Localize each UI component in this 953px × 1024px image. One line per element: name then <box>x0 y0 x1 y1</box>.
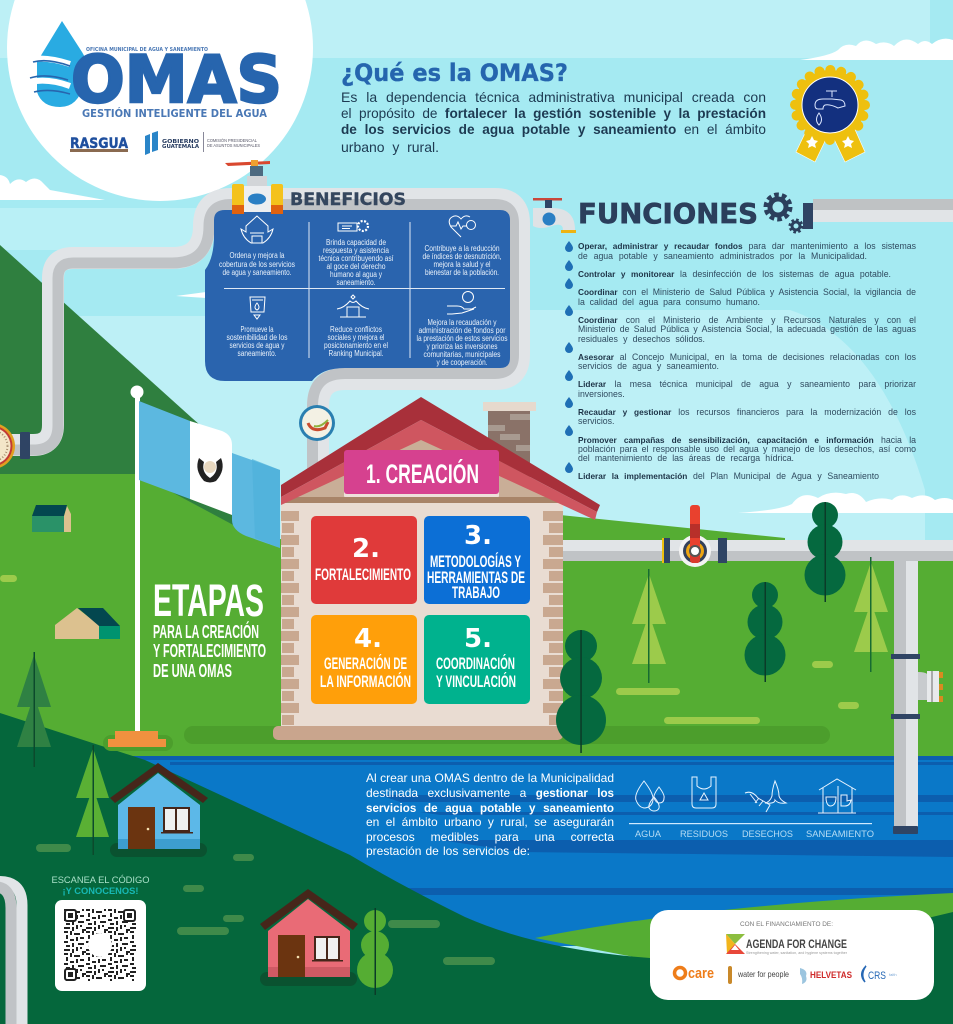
functions list: Controlar y monitorear la desinfección de los sistemas de agua potable. <box>578 269 891 279</box>
water paragraph <box>366 771 614 858</box>
heading: ETAPAS: DE UNA OMAS <box>153 661 232 681</box>
badge with faucet <box>795 70 865 162</box>
functions list: Operar, administrar y recaudar fondos para dar mantenimiento a los sistemas <box>578 241 916 251</box>
grass marks <box>0 575 859 724</box>
functions list: Promover campañas de sensibilización, capacitación e información hacia la <box>578 435 916 445</box>
tree: bush by pink house <box>357 908 393 995</box>
benefit: nutrición: Contribuye a la reducción <box>424 244 500 253</box>
logo: CRS <box>862 966 897 982</box>
water paragraph: en el ámbito urbano y rural, se asegurarán <box>366 815 614 829</box>
service icons and labels: AGUA <box>635 829 662 840</box>
benefit: sostenibilidad: servicios de agua y <box>230 341 284 350</box>
tree: dark conifer left <box>17 652 51 767</box>
roof <box>281 397 600 512</box>
cloud: top right <box>800 39 953 60</box>
benefit: capacidad <box>318 221 394 287</box>
functions list: servicios de agua y saneamiento. <box>578 361 719 371</box>
service icons and labels: RESIDUOS <box>680 829 728 840</box>
small tan house <box>55 608 120 639</box>
benefit: recaudación: la prestación de estos servicios <box>416 334 508 343</box>
benefit: recaudación: comunitarias, municipales <box>424 350 500 359</box>
Guatemala flag with pole <box>103 386 280 751</box>
functions list: Ministerio de Salud Pública y Asistencia Social, la adecuada gestión de las aguas <box>578 324 916 334</box>
benefit: capacidad: respuesta y asistencia <box>323 246 389 255</box>
stage 1 banner <box>344 450 499 497</box>
small green house <box>32 505 71 532</box>
benefit: recaudación: administración de fondos por <box>418 326 506 335</box>
logo: Agenda for Change: Strengthening water, sanitation, and hygiene systems together <box>746 951 848 955</box>
partner logos in circle: GUATEMALA <box>162 144 200 150</box>
functions list: del mantenimiento de las áreas de recarga hídrica. <box>578 453 794 463</box>
base <box>273 726 563 740</box>
benefit: conflictos: posicionamiento en el <box>324 341 388 350</box>
benefit: capacidad: Brinda capacidad de <box>326 238 386 247</box>
service icons and labels: SANEAMIENTO <box>806 829 874 840</box>
gable <box>292 438 552 500</box>
benefit: cobertura <box>219 216 295 277</box>
benefit: nutrición: bienestar de la población. <box>425 268 499 277</box>
cloud: left <box>0 175 105 200</box>
ground shadow strip <box>184 726 830 744</box>
logo: water for people <box>728 966 789 984</box>
intro text block: urbano y rural. <box>341 139 439 155</box>
stage 3 card <box>424 516 530 604</box>
partner logos in circle: COMISIÓN PRESIDENCIAL <box>207 137 257 143</box>
logo circle <box>7 0 313 201</box>
tree: light conifer right <box>854 557 888 672</box>
benefit: capacidad: saneamiento. <box>336 278 376 287</box>
heading: ETAPAS: Y FORTALECIMIENTO <box>153 641 266 661</box>
valve on top of benefits <box>225 160 283 214</box>
heading: BENEFICIOS: BENEFICIOS <box>290 190 406 210</box>
functions list: de agua potable y saneamiento administrados por la Municipalidad. <box>578 251 867 261</box>
functions list: Asesorar al Concejo Municipal, en la toma de decisiones relacionadas con los <box>578 352 916 362</box>
stage 3 card: HERRAMIENTAS DE <box>427 569 525 587</box>
service icons and labels <box>629 777 874 840</box>
intro text block: el propósito de fortalecer la gestión sostenible y la prestación <box>341 106 766 120</box>
stage 3 card: 3. <box>464 521 492 551</box>
heading: ¿Qué es la OMAS?: ¿Qué es la OMAS? <box>341 59 568 87</box>
icon: agua <box>636 781 664 811</box>
stage 2 card <box>311 516 417 604</box>
stage 5 card: COORDINACIÓN <box>436 654 515 673</box>
OMAS logo: OFICINA MUNICIPAL DE AGUA Y SANEAMIENTO <box>86 47 208 53</box>
partner logos in circle: RASGUA <box>70 136 128 152</box>
pink house <box>260 889 358 986</box>
water paragraph: prestación de los servicios de: <box>366 844 530 858</box>
river <box>130 756 953 946</box>
partner logos in circle <box>70 131 260 155</box>
stage 4 card: 4. <box>354 624 382 654</box>
functions list: servicios. <box>578 416 614 426</box>
stage 3 card: TRABAJO <box>452 584 500 602</box>
stage 5 card: Y VINCULACIÓN <box>436 672 516 691</box>
dark green hill foreground <box>0 713 953 1024</box>
benefit: nutrición: mejora la salud y el <box>434 260 491 269</box>
benefit: cobertura: Ordena y mejora la <box>230 251 285 260</box>
QR caption <box>52 875 150 897</box>
benefit: recaudación: y prioriza las inversiones <box>426 342 498 351</box>
service icons and labels: DESECHOS <box>742 829 793 840</box>
main pipe: from gauge around benefits panel <box>10 199 519 470</box>
heading: ETAPAS: PARA LA CREACIÓN <box>153 621 259 642</box>
QR code <box>55 900 146 991</box>
intro text block: Es la dependencia técnica administrativa municipal creada con <box>341 89 766 105</box>
logo: CRS: CRS <box>868 970 886 982</box>
benefit: sostenibilidad: saneamiento. <box>238 349 276 358</box>
tree: dark round right <box>804 502 846 602</box>
water paragraph: procesos medibles para una correcta <box>366 830 614 844</box>
chimney <box>483 402 536 485</box>
house wall <box>281 500 563 726</box>
functions list: Coordinar con el Ministerio de Ambiente y Recursos Naturales y con el <box>578 315 916 325</box>
water paragraph: destinada exclusivamente a gestionar los <box>366 786 614 800</box>
main green land <box>0 474 280 760</box>
stage 4 card: LA INFORMACIÓN <box>320 672 411 691</box>
cloud: sliver behind benefits <box>176 292 206 298</box>
tree: dark round beside house <box>556 630 606 753</box>
right green land <box>270 515 953 770</box>
heading: FUNCIONES: FUNCIONES <box>578 198 758 230</box>
grass marks dark hill <box>36 844 495 965</box>
heading: ETAPAS: ETAPAS <box>153 575 264 626</box>
tree: dark round middle <box>744 582 786 682</box>
benefit: recaudación <box>416 292 508 367</box>
tree: light conifer center <box>632 569 666 683</box>
red valve on right pipe <box>662 505 727 567</box>
stage 5 card <box>424 615 530 704</box>
stage 4 card <box>311 615 417 704</box>
sponsor panel <box>650 910 934 1000</box>
functions list: Coordinar con el Ministerio de Salud Pública y Asistencia Social, la vigilancia de <box>578 287 916 297</box>
benefit: capacidad: humano al agua y <box>330 270 382 279</box>
emblem on pipe <box>299 405 335 441</box>
benefit: sostenibilidad: sostenibilidad de los <box>226 333 288 342</box>
benefit: conflictos: Ranking Municipal. <box>328 349 384 358</box>
logo: care: care <box>688 966 714 982</box>
functions list: población para el responsable uso del agua y manejo de los desechos, así como <box>578 444 916 454</box>
logo: Helvetas <box>800 968 852 984</box>
stage 2 card: FORTALECIMIENTO <box>315 565 411 584</box>
bottom left pipe <box>0 881 22 1024</box>
intro text block <box>341 89 766 155</box>
benefit: cobertura: de agua y saneamiento. <box>222 268 292 277</box>
tree: conifer at house <box>76 745 109 855</box>
benefit: recaudación: y de cooperación. <box>436 358 488 367</box>
stage 3 card: METODOLOGÍAS Y <box>430 552 521 571</box>
house <box>273 397 600 740</box>
logo: Agenda for Change <box>726 934 848 955</box>
OMAS logo: OMAS <box>71 43 282 118</box>
icon: desechos <box>745 781 786 812</box>
intro text block: de los servicios de agua potable y saneamiento en el ámbito <box>341 122 766 137</box>
icon: residuos <box>692 777 716 808</box>
gears and right pipe <box>766 195 953 232</box>
light green far shore <box>535 893 953 960</box>
logo: Agenda for Change: AGENDA FOR CHANGE <box>746 939 847 951</box>
faucet at left of FUNCIONES <box>533 198 576 233</box>
logo: water for people: water for people <box>737 969 789 979</box>
gauge on left pipe <box>0 423 30 469</box>
panel: benefits background <box>205 210 510 381</box>
house bricks <box>281 511 563 725</box>
functions list: Liderar la mesa técnica municipal de agua y saneamiento para priorizar <box>578 379 916 389</box>
blue house <box>110 763 208 857</box>
logo: Helvetas: HELVETAS <box>810 970 852 980</box>
QR caption: ¡Y CONOCENOS! <box>62 886 138 897</box>
logo: care <box>674 966 714 982</box>
benefit: conflictos <box>324 295 388 358</box>
logo: CRS: faith <box>889 972 897 977</box>
benefit: conflictos: Reduce conflictos <box>330 325 382 334</box>
icon: saneamiento <box>818 779 856 813</box>
sponsor panel: CON EL FINANCIAMIENTO DE: <box>740 921 833 928</box>
functions list: la calidad del agua para consumo humano. <box>578 297 760 307</box>
stage 2 card: 2. <box>352 534 380 564</box>
benefit: sostenibilidad: Promueve la <box>240 325 274 334</box>
stage 4 card: GENERACIÓN DE <box>324 654 407 673</box>
water paragraph: Al crear una OMAS dentro de la Municipalidad <box>366 771 614 785</box>
benefit: recaudación: Mejora la recaudación y <box>428 318 496 327</box>
partner logos in circle: DE ASUNTOS MUNICIPALES <box>207 143 260 148</box>
dark green mountain <box>0 245 280 560</box>
OMAS logo <box>30 21 282 120</box>
functions list <box>565 241 916 481</box>
stage 5 card: 5. <box>464 624 492 654</box>
heading: ETAPAS <box>153 575 266 681</box>
icon: logo water drop <box>30 21 87 107</box>
benefit: capacidad: técnica contribuyendo así <box>318 254 394 263</box>
stage 1 banner: 1. CREACIÓN <box>366 458 479 489</box>
functions list: residuales y desechos sólidos. <box>578 334 705 344</box>
functions list: Recaudar y gestionar los recursos financieros para la modernización de los <box>578 407 916 417</box>
QR caption: ESCANEA EL CÓDIGO <box>52 875 150 886</box>
benefit: nutrición <box>422 216 502 277</box>
partner logos in circle: GOBIERNO <box>162 139 199 145</box>
OMAS logo: GESTIÓN INTELIGENTE DEL AGUA <box>82 107 267 120</box>
benefits grid lines and items <box>219 216 508 367</box>
functions list: Liderar la implementación del Plan Municipal de Agua y Saneamiento <box>578 471 879 481</box>
cloud: right <box>738 493 953 513</box>
benefit: conflictos: sociales y mejora el <box>328 333 385 342</box>
benefit: capacidad: al goce del derecho <box>326 262 386 271</box>
functions list: inversiones. <box>578 389 625 399</box>
benefit: sostenibilidad <box>226 297 288 358</box>
benefit: cobertura: cobertura de los servicios <box>219 260 295 269</box>
water paragraph: servicios de agua potable y saneamiento <box>366 802 614 815</box>
right horizontal and vertical water pipe <box>560 540 953 834</box>
benefit: nutrición: de índices de desnutrición, <box>422 252 502 261</box>
